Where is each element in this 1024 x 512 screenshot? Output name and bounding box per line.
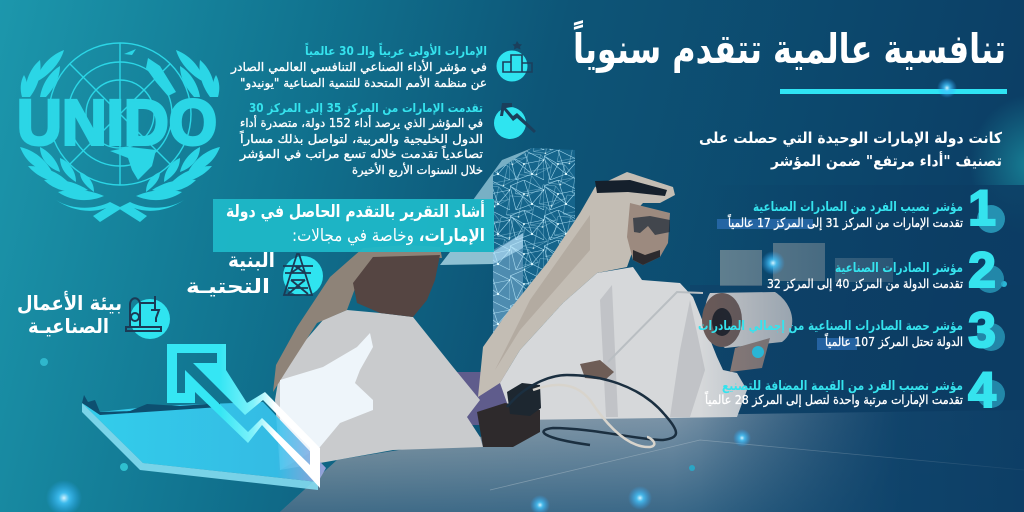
callout box: أشاد التقرير بالتقدم الحاصل في دولة — [226, 200, 485, 222]
label: infrastructure: البنية — [228, 248, 275, 272]
callout box — [213, 199, 494, 252]
cable — [507, 375, 676, 447]
table — [280, 410, 1024, 512]
ghutra fold — [495, 215, 590, 370]
handheld cylinder — [702, 292, 792, 372]
map patch on shoulder — [280, 333, 373, 470]
thobe left man — [275, 310, 483, 470]
globe emblem — [49, 43, 191, 185]
room windows behind the men — [690, 243, 1024, 415]
text block: rank progress: خلال السنوات الأربع الأخيرة — [352, 162, 483, 178]
ghutra right man — [478, 172, 675, 397]
intro text — [699, 129, 1002, 170]
UNIDO wordmark: UNIDO — [17, 86, 217, 158]
purple desk behind — [450, 372, 545, 425]
indicator 4: 4 — [968, 362, 996, 418]
indicator 1: مؤشر نصيب الفرد من الصادرات الصناعية — [753, 200, 963, 215]
ghutra left man — [273, 245, 442, 392]
UNIDO logo — [17, 43, 220, 222]
icon: podium — [496, 41, 532, 82]
indicator 2 — [767, 242, 1004, 298]
indicator 1: تقدمت الإمارات من المركز 31 إلى المركز 17 عالمياً — [728, 213, 963, 231]
indicator 4: تقدمت الإمارات مرتبة واحدة لتصل إلى المركز 28 عالمياً — [705, 390, 963, 408]
text block: first Arab rank: في مؤشر الأداء الصناعي التنافسي العالمي الصادر — [230, 59, 487, 75]
hand and rod — [580, 360, 614, 380]
arm and black grip — [477, 403, 540, 447]
agal — [595, 180, 667, 196]
man on the left — [273, 245, 541, 470]
icon: industrial robot — [126, 296, 170, 339]
text block: first Arab rank: الإمارات الأولى عربياً والـ 30 عالمياً — [305, 42, 487, 59]
indicator 2: 2 — [968, 242, 996, 298]
intro text: كانت دولة الإمارات الوحيدة التي حصلت على — [699, 129, 1002, 147]
label: industrial business environment: الصناعيـة — [28, 314, 109, 338]
text block: rank progress: في المؤشر الذي يرصد أداء 152 دولة، متصدرة أداء — [240, 115, 483, 131]
man on the right — [478, 172, 747, 420]
icon: transmission tower — [283, 254, 323, 296]
indicator 1: 1 — [968, 180, 996, 236]
indicator 3: 3 — [968, 302, 996, 358]
label: industrial business environment: بيئة الأعمال — [17, 290, 122, 315]
label: infrastructure: التحتيـة — [186, 274, 270, 298]
glow dots — [40, 251, 1007, 512]
indicator 4: مؤشر نصيب الفرد من القيمة المضافة للتصنيع — [722, 379, 963, 394]
intro text: تصنيف "أداء مرتفع" ضمن المؤشر — [770, 151, 1002, 170]
text block: first Arab rank — [230, 42, 487, 91]
icon: declining arrow pie — [494, 103, 536, 139]
thobe right man — [500, 267, 747, 420]
label: infrastructure — [186, 248, 275, 298]
face left man — [353, 255, 440, 317]
label: industrial business environment — [17, 290, 122, 338]
indicator 3: الدولة تحتل المركز 107 عالمياً — [825, 332, 963, 350]
face — [627, 203, 670, 265]
indicator 2: مؤشر الصادرات الصناعية — [835, 261, 963, 276]
indicator 1 — [717, 180, 1005, 236]
growth arrow — [167, 344, 320, 488]
thobe shading — [600, 285, 705, 417]
text block: first Arab rank: عن منظمة الأمم المتحدة للتنمية الصناعية "يونيدو" — [240, 75, 487, 91]
glasses — [633, 216, 670, 235]
indicator 3 — [698, 302, 1005, 358]
text block: rank progress: تصاعدياً تقدمت خلاله تسع مراتب في المؤشر — [239, 145, 483, 162]
indicator 2: تقدمت الدولة من المركز 40 إلى المركز 32 — [767, 276, 963, 292]
text block: rank progress: تقدمت الإمارات من المركز 35 إلى المركز 30 — [249, 101, 483, 115]
laurel wreath right — [118, 50, 220, 222]
indicator 4 — [705, 362, 1005, 418]
text block: rank progress — [239, 101, 483, 178]
indicator 3: مؤشر حصة الصادرات الصناعية من إجمالي الصادرات — [698, 319, 963, 334]
callout box: الإمارات، وخاصة في مجالات: — [292, 226, 485, 246]
continents — [110, 49, 176, 180]
text block: rank progress: الدول الخليجية والعربية، لتواصل بذلك مساراً — [240, 130, 483, 147]
heading underline — [780, 78, 1007, 98]
map platform — [82, 395, 326, 490]
big mesh number one — [440, 148, 575, 340]
laurel wreath left — [20, 50, 122, 222]
